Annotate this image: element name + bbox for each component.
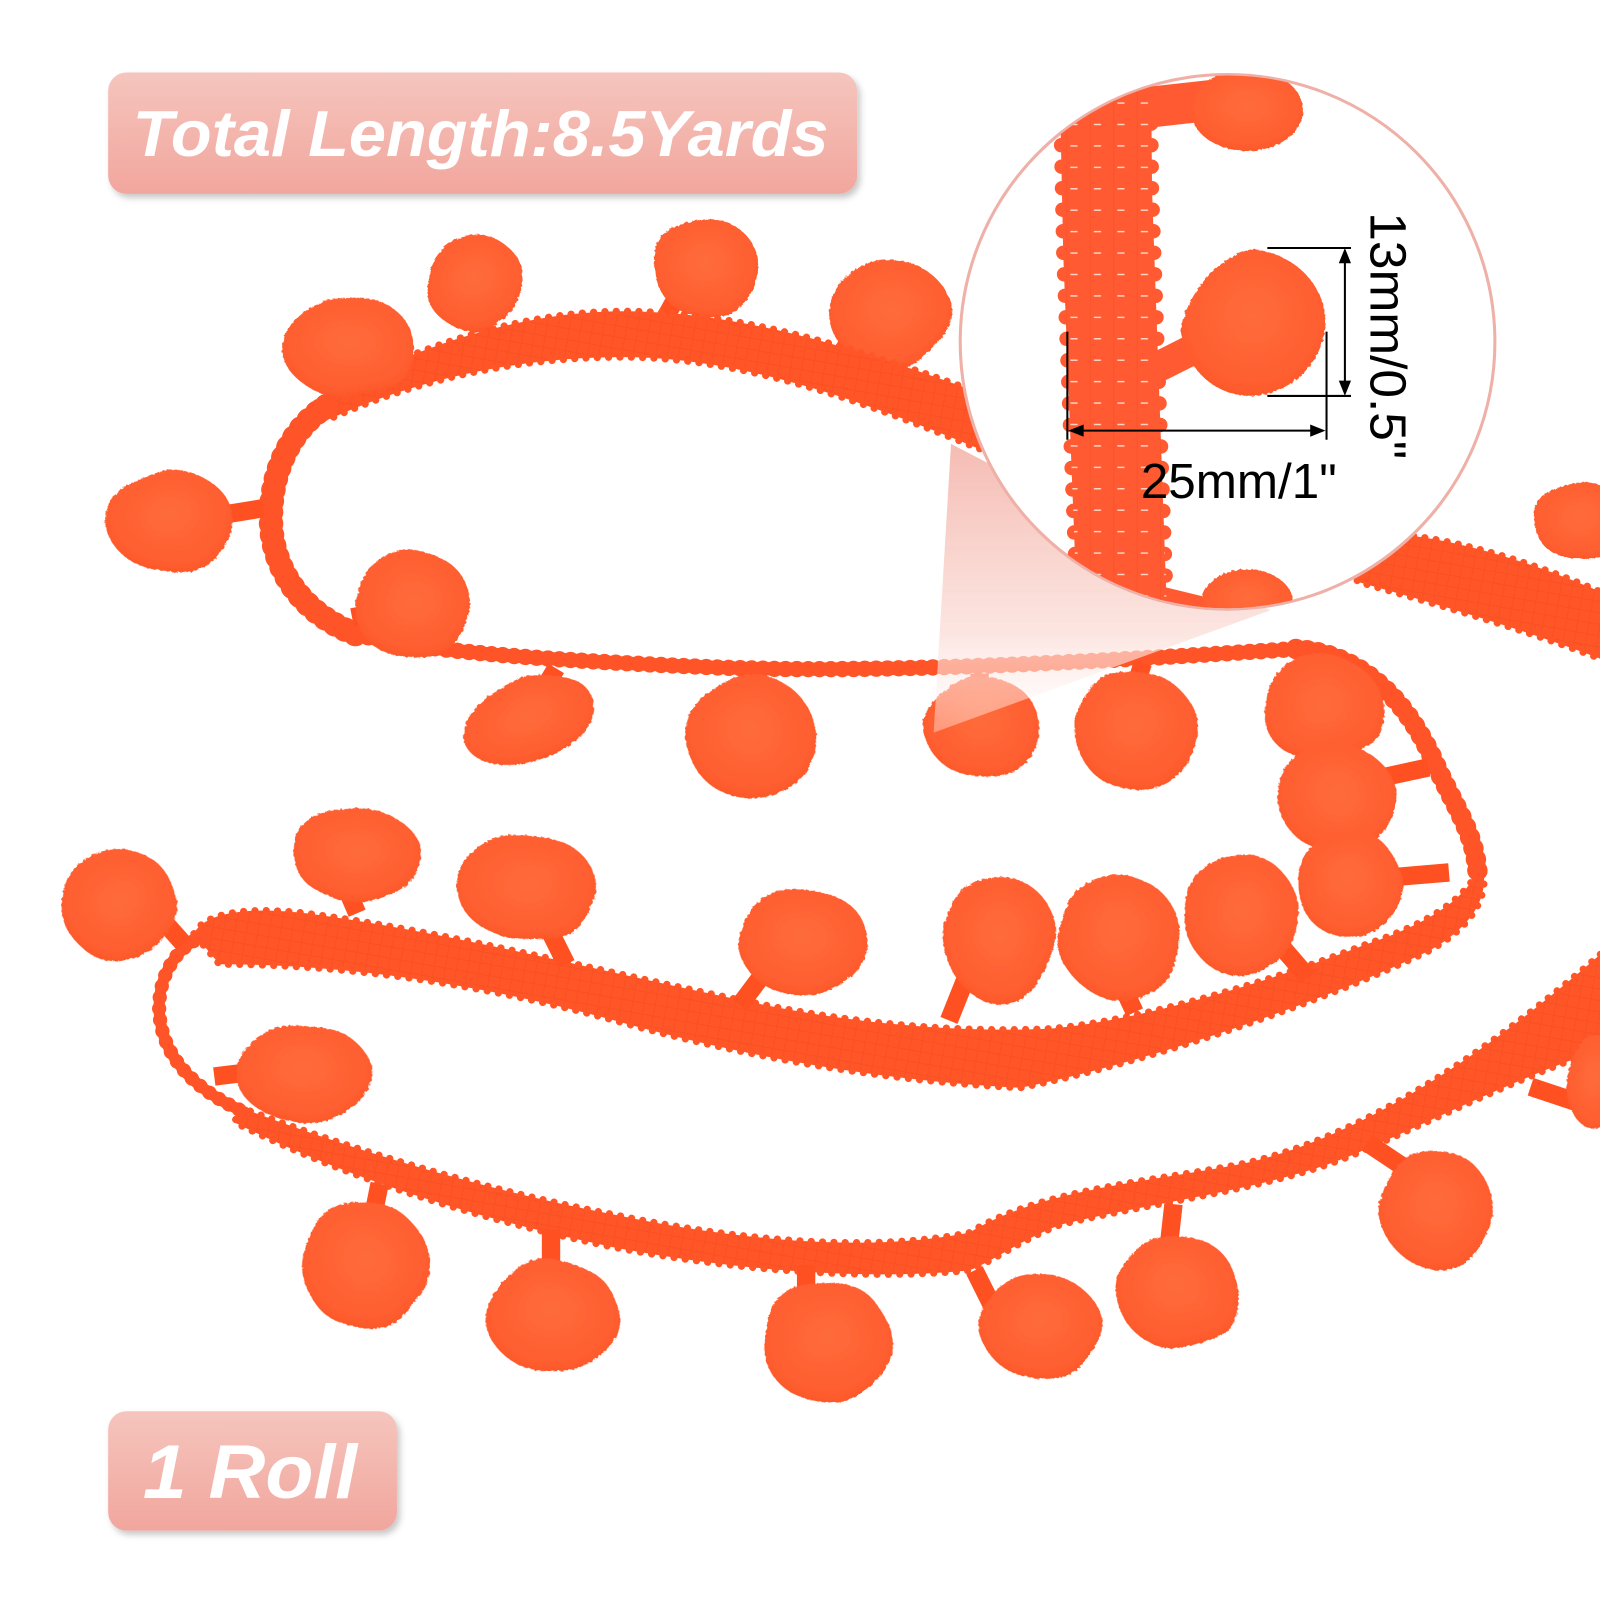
badge: quantity: 1 Roll <box>143 1430 359 1515</box>
zoom callout circle <box>960 61 1495 635</box>
callout wedge <box>934 444 1270 733</box>
badge: total length <box>108 72 857 194</box>
dimension: trim width 25mm: 25mm/1" <box>1141 454 1337 509</box>
pom pom trim ribbon <box>159 311 1600 1274</box>
badge: total length: Total Length:8.5Yards <box>133 97 829 170</box>
magnified trim <box>1059 61 1326 635</box>
pom poms <box>62 296 1600 1403</box>
dimension: pom height 13mm <box>1267 212 1416 459</box>
badge: quantity <box>108 1411 397 1531</box>
dimension: trim width 25mm <box>1067 332 1337 509</box>
pom stems <box>143 508 1592 1311</box>
poms behind the top band <box>426 218 1600 559</box>
dimension: pom height 13mm: 13mm/0.5" <box>1359 212 1416 459</box>
